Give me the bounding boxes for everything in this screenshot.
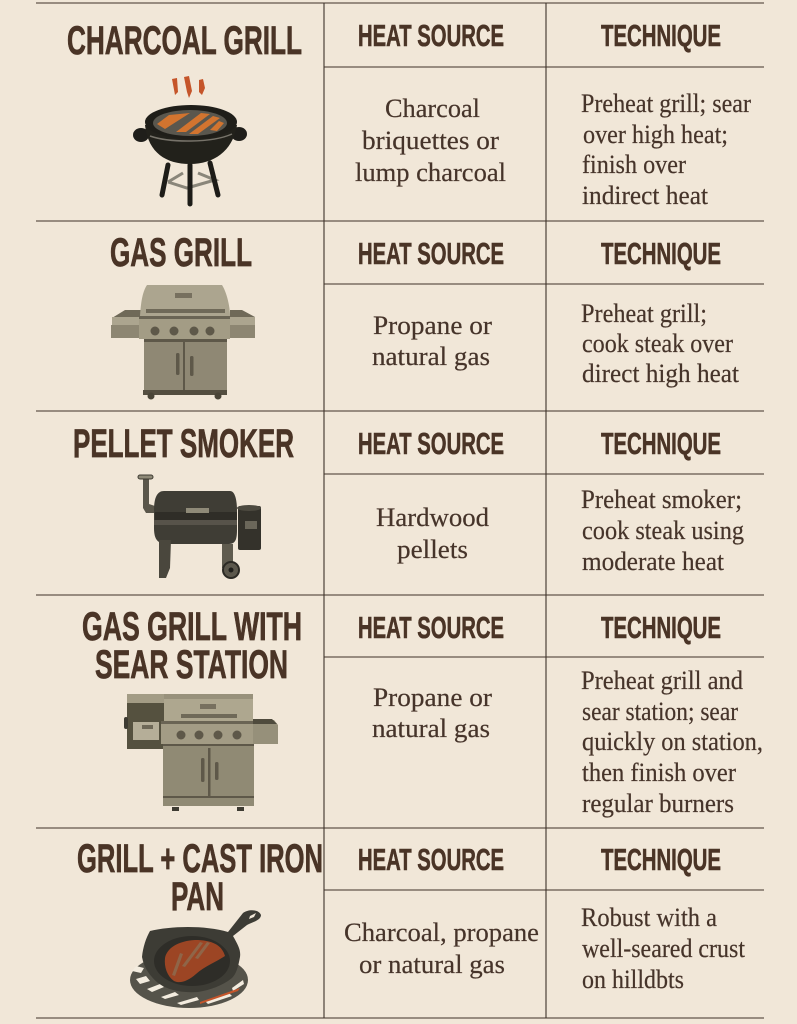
heading: grill + cast iron pan: PAN xyxy=(171,875,224,919)
text: charcoal fuel: Charcoal xyxy=(385,94,480,123)
text: pellet fuel: pellets xyxy=(397,535,468,564)
column header: technique: TECHNIQUE xyxy=(601,610,721,645)
text: gas fuel: Propane or xyxy=(373,311,492,340)
text: cast iron fuel: Charcoal, propane xyxy=(344,918,539,947)
text: gas technique: Preheat grill; xyxy=(581,299,707,328)
column header: technique: TECHNIQUE xyxy=(601,842,721,877)
text: sear station technique: quickly on station, xyxy=(582,727,763,756)
text: pellet technique: moderate heat xyxy=(582,547,725,576)
icon: charcoal grill xyxy=(133,76,247,204)
panel: gas grill technique xyxy=(581,236,740,388)
text: charcoal technique: indirect heat xyxy=(582,181,709,210)
heading: pellet smoker: PELLET SMOKER xyxy=(73,422,294,466)
icon: gas grill xyxy=(111,285,255,400)
panel: pellet smoker heat source xyxy=(358,426,504,564)
column header: heat source: HEAT SOURCE xyxy=(358,236,504,271)
text: pellet technique: Preheat smoker; xyxy=(581,485,742,514)
text: cast iron fuel: or natural gas xyxy=(359,950,505,979)
text: sear station technique: regular burners xyxy=(582,789,734,818)
text: cast iron technique: Robust with a xyxy=(581,903,717,932)
text: cast iron technique: on hilldbts xyxy=(582,965,684,994)
text: cast iron technique: well-seared crust xyxy=(582,934,746,963)
text: sear station technique: Preheat grill and xyxy=(581,666,743,695)
panel: gas grill xyxy=(110,231,255,400)
panel: gas grill with sear station xyxy=(82,605,302,811)
text: sear station technique: then finish over xyxy=(582,758,736,787)
column header: heat source: HEAT SOURCE xyxy=(358,610,504,645)
text: charcoal fuel: briquettes or xyxy=(362,126,499,155)
text: gas fuel: natural gas xyxy=(372,342,490,371)
panel: pellet smoker xyxy=(73,422,294,578)
text: charcoal technique: Preheat grill; sear xyxy=(581,89,751,118)
heading: gas grill with sear station: GAS GRILL WITH xyxy=(82,605,302,649)
panel: charcoal grill heat source xyxy=(355,18,506,187)
panel: charcoal grill technique xyxy=(581,18,751,210)
text: sear station fuel: Propane or xyxy=(373,683,492,712)
heading: grill + cast iron pan: GRILL + CAST IRON xyxy=(77,837,323,881)
heading: gas grill with sear station: SEAR STATION xyxy=(95,643,288,687)
panel: pellet smoker technique xyxy=(581,426,744,576)
text: pellet fuel: Hardwood xyxy=(376,503,489,532)
column header: heat source: HEAT SOURCE xyxy=(358,842,504,877)
column header: technique: TECHNIQUE xyxy=(601,236,721,271)
panel: sear station heat source xyxy=(358,610,504,743)
text: gas technique: cook steak over xyxy=(582,329,733,358)
icon: gas grill with sear station xyxy=(124,694,278,811)
column header: technique: TECHNIQUE xyxy=(601,426,721,461)
icon: pellet smoker xyxy=(138,475,261,578)
text: charcoal fuel: lump charcoal xyxy=(355,158,506,187)
text: gas technique: direct high heat xyxy=(582,359,740,388)
panel: gas grill heat source xyxy=(358,236,504,371)
icon: cast iron pan on grate xyxy=(130,910,261,1008)
heading: gas grill: GAS GRILL xyxy=(110,231,252,275)
text: pellet technique: cook steak using xyxy=(582,516,744,545)
panel: cast iron heat source xyxy=(344,842,539,979)
text: charcoal technique: finish over xyxy=(582,150,686,179)
text: charcoal technique: over high heat; xyxy=(583,120,728,149)
panel: charcoal grill xyxy=(67,19,302,204)
column header: heat source: HEAT SOURCE xyxy=(358,426,504,461)
panel: cast iron technique xyxy=(581,842,746,994)
text: sear station technique: sear station; sear xyxy=(582,697,738,726)
column header: technique: TECHNIQUE xyxy=(601,18,721,53)
panel: sear station technique xyxy=(581,610,763,818)
column header: heat source: HEAT SOURCE xyxy=(358,18,504,53)
panel: grill + cast iron pan xyxy=(77,837,323,1008)
heading: charcoal grill: CHARCOAL GRILL xyxy=(67,19,302,63)
text: sear station fuel: natural gas xyxy=(372,714,490,743)
